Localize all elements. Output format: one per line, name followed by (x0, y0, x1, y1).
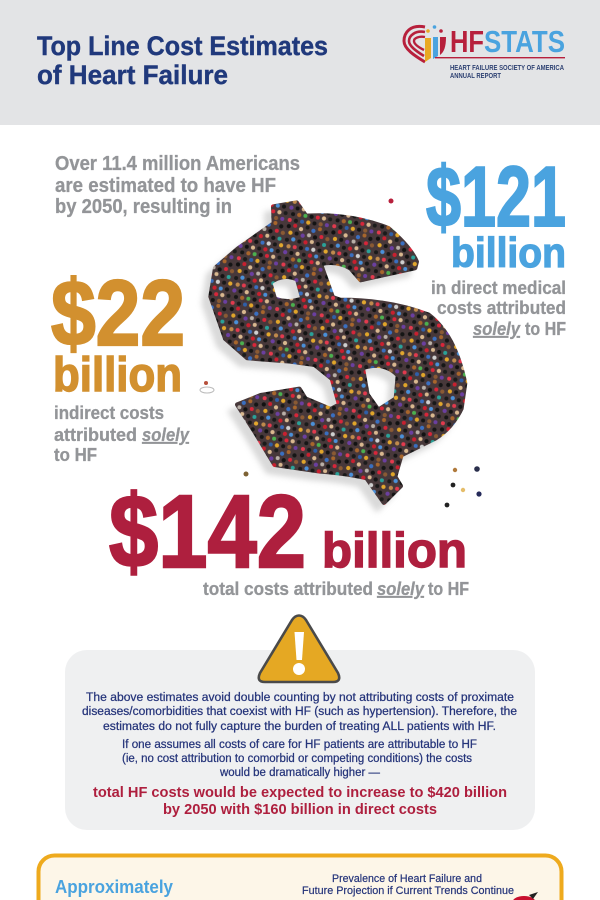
stat: $22 billion indirect costs (51, 261, 190, 465)
caveat red conclusion: total HF costs would be expected to increase to $420 billion (93, 784, 507, 801)
title (37, 31, 328, 90)
header band (0, 0, 600, 125)
stat: $142 billion total costs: total costs attributed (203, 579, 373, 599)
logo wordmark (435, 24, 565, 80)
stat: $22 billion indirect costs: billion (53, 349, 182, 402)
caveat red conclusion (93, 784, 507, 818)
caveat body text: would be dramatically higher — (219, 765, 381, 779)
intro text: by 2050, resulting in (55, 196, 232, 218)
intro text: are estimated to have HF (55, 175, 276, 197)
stat: $121 billion direct costs: solely (473, 319, 521, 339)
caveat body text: estimates do not fully capture the burden of treating ALL patients with HF. (103, 719, 496, 733)
stat: $22 billion indirect costs: to HF (54, 445, 97, 465)
chart title: Prevalence of Heart Failure and (332, 873, 482, 885)
icon: warning triangle (259, 616, 339, 682)
stat: $142 billion total costs: to HF (428, 579, 469, 599)
stat: $142 billion total costs (109, 474, 469, 599)
stat: $22 billion indirect costs: $22 (51, 261, 185, 365)
logo wordmark: ANNUAL REPORT (450, 73, 502, 80)
panel: prevalence (38, 856, 562, 900)
stat: $142 billion total costs: solely (377, 579, 425, 599)
logo wordmark: HEART FAILURE SOCIETY OF AMERICA (450, 65, 564, 72)
panel: caveat (65, 650, 535, 830)
stat: $22 billion indirect costs: indirect costs (54, 403, 164, 423)
intro text (55, 153, 300, 218)
caveat red conclusion: by 2050 with $160 billion in direct costs (163, 801, 437, 818)
caveat body text: The above estimates avoid double counting by not attributing costs of proximate (86, 690, 514, 704)
stat: $142 billion total costs: $142 (109, 474, 306, 589)
logo wordmark: HF (450, 24, 484, 59)
stat: $22 billion indirect costs: solely (142, 425, 190, 445)
icon: chart arrow top (512, 892, 538, 900)
scattered people (200, 198, 482, 507)
approximately label: Approximately (55, 877, 173, 897)
caveat body text (82, 690, 517, 779)
title: Top Line Cost Estimates (37, 31, 328, 61)
logo wordmark: STATS (484, 24, 565, 59)
stat: $121 billion direct costs: costs attributed (437, 298, 566, 318)
stat: $142 billion total costs: billion (322, 524, 467, 578)
stat: $121 billion direct costs: in direct medical (431, 278, 566, 298)
crowd dollar sign image (200, 198, 482, 513)
caveat body text: diseases/comorbidities that coexist with HF (such as hypertension). Therefore, the (82, 704, 517, 718)
stat: $121 billion direct costs: to HF (525, 319, 566, 339)
stat: $22 billion indirect costs: attributed (54, 425, 137, 445)
title: of Heart Failure (37, 60, 228, 90)
caveat body text: (ie, no cost attribution to comorbid or competing conditions) the costs (122, 751, 472, 765)
chart title (302, 873, 514, 897)
caveat body text: If one assumes all costs of care for HF patients are attributable to HF (122, 737, 477, 751)
icon: heart with people (404, 25, 446, 62)
stat: $121 billion direct costs: billion (451, 229, 566, 276)
chart title: Future Projection if Current Trends Continue (302, 885, 514, 897)
stat: $121 billion direct costs (426, 150, 566, 339)
intro text: Over 11.4 million Americans (55, 153, 300, 175)
logo: HFSTATS (404, 24, 565, 80)
